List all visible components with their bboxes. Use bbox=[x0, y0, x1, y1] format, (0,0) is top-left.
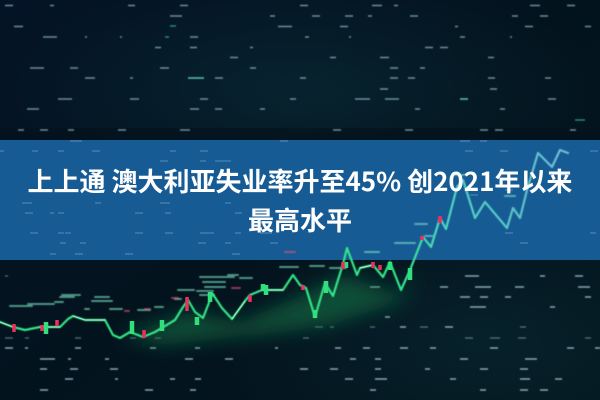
blue headline band bbox=[0, 140, 600, 260]
price line bbox=[0, 150, 568, 338]
headline: title text: 最高水平 bbox=[248, 201, 352, 238]
glow under price line bbox=[120, 268, 414, 345]
band ticker marks bbox=[0, 141, 598, 254]
candlestick price chart bbox=[0, 150, 568, 338]
headline: title text: 上上通 澳大利亚失业率升至45% 创2021年以来 bbox=[28, 162, 572, 199]
red candles bbox=[14, 216, 440, 338]
highlight on line bbox=[0, 265, 373, 327]
headline: title text bbox=[28, 162, 572, 238]
chart labels around the line bbox=[10, 175, 515, 311]
green candles bbox=[46, 262, 410, 334]
